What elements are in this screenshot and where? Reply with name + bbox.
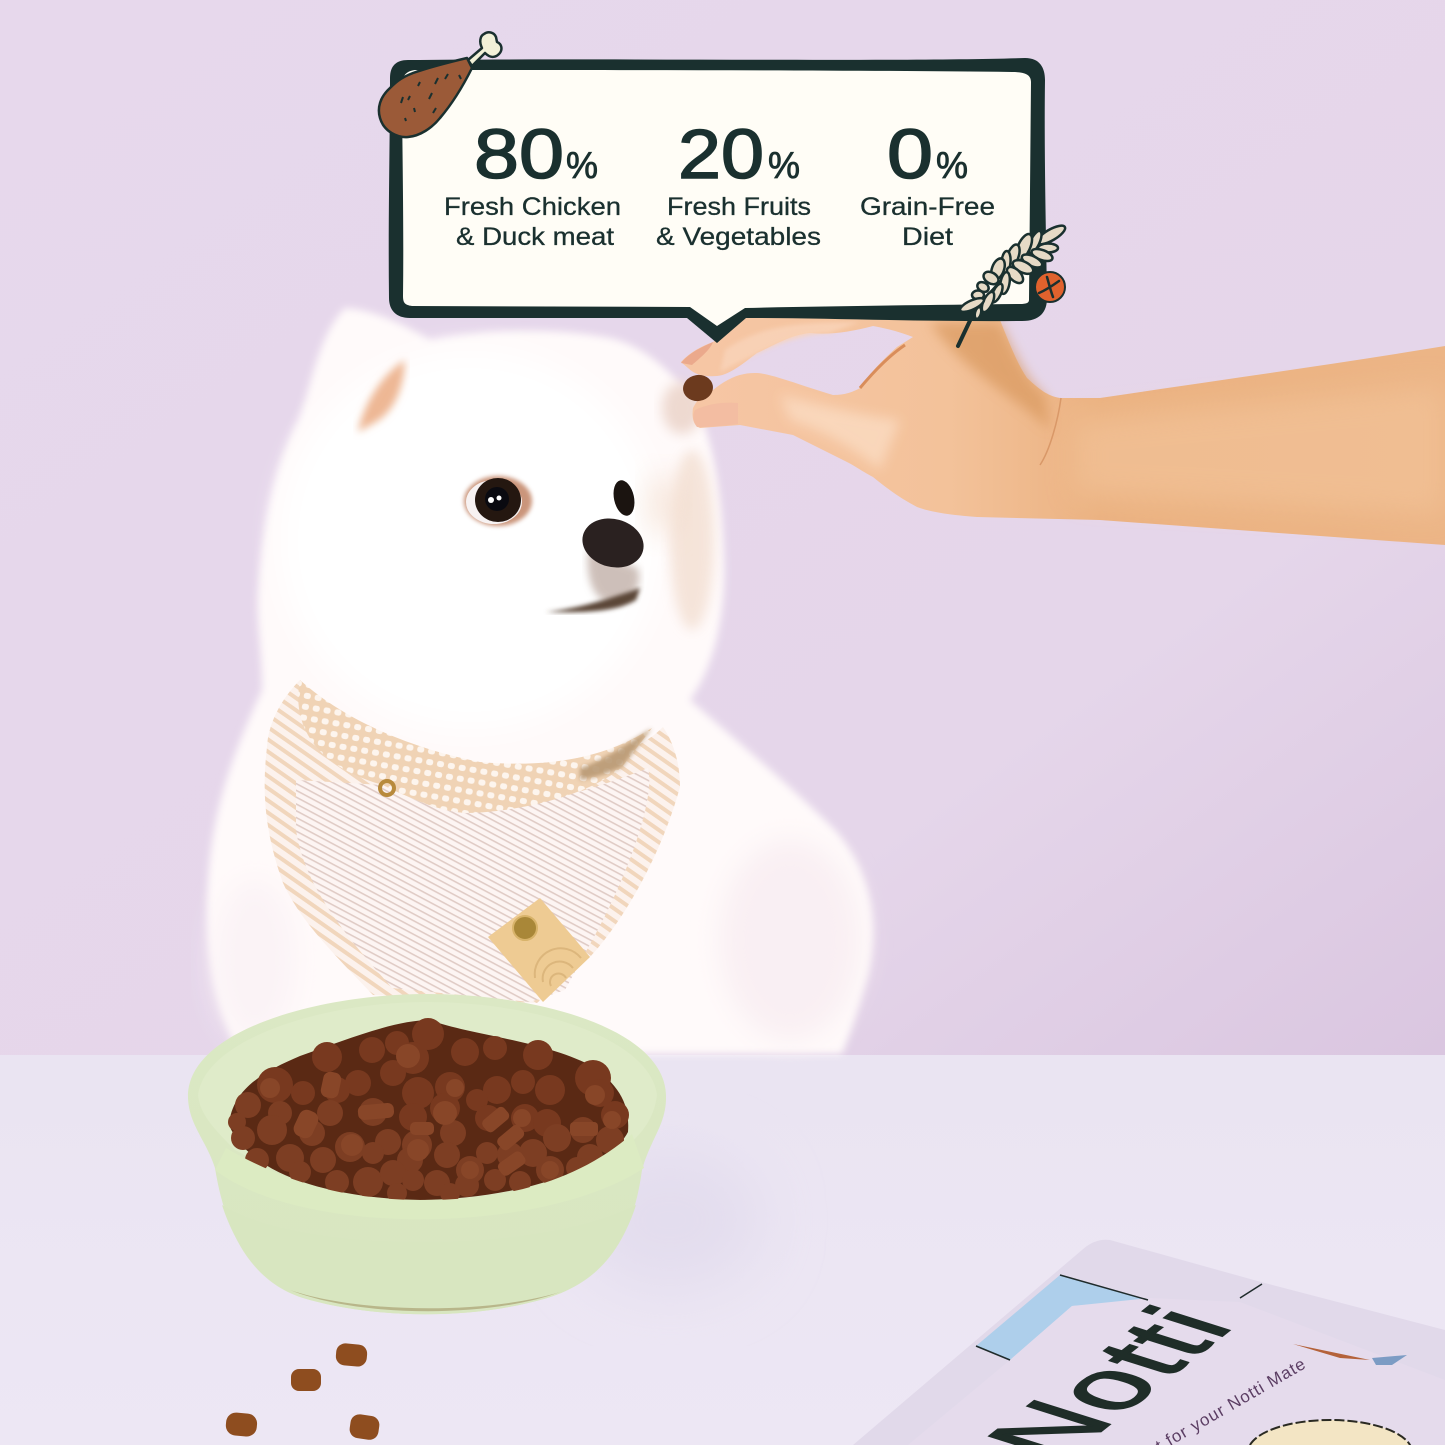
bowl foot shadow bbox=[290, 1290, 560, 1311]
wrist crease bbox=[1040, 398, 1061, 465]
arm and hand shape bbox=[681, 316, 1445, 545]
neck band checks bbox=[298, 680, 652, 813]
dog silhouette bbox=[207, 308, 873, 1054]
background wall bbox=[0, 0, 1445, 1056]
collar shadow bbox=[580, 728, 652, 780]
blue accent bbox=[1372, 1355, 1407, 1365]
back of hand shade bbox=[930, 322, 1050, 430]
bubble fill bbox=[402, 70, 1031, 326]
thumb nail bbox=[693, 403, 738, 427]
bowl bbox=[188, 994, 666, 1314]
stat: 20% bbox=[656, 115, 821, 251]
stat: 0%: Diet bbox=[902, 223, 953, 251]
bandana bbox=[265, 680, 680, 1003]
arm highlight bbox=[1075, 385, 1445, 515]
stat: 0%: 0 bbox=[887, 115, 933, 193]
grommet bbox=[380, 781, 394, 795]
stat: 20%: 20 bbox=[678, 115, 764, 193]
thumb highlight bbox=[780, 395, 900, 470]
stat: 80%: & Duck meat bbox=[456, 223, 614, 251]
stat: 0%: Grain-Free bbox=[860, 193, 995, 221]
bowl body bbox=[188, 994, 666, 1314]
cheek fur shading bbox=[670, 450, 714, 630]
bowl lower band shading bbox=[222, 1205, 636, 1314]
finger highlight bbox=[720, 322, 860, 372]
index nail bbox=[681, 342, 713, 365]
pouch seal lines bbox=[976, 1275, 1262, 1360]
lower left body shading bbox=[215, 880, 295, 1040]
white face bbox=[280, 350, 660, 730]
red cross badge bbox=[1035, 272, 1065, 302]
wheat grains bbox=[958, 222, 1068, 320]
bandana fringe base bbox=[265, 680, 680, 1003]
scattered kibble bbox=[225, 1343, 381, 1441]
speech bubble bbox=[389, 58, 1047, 343]
stat: 80%: 80 bbox=[474, 115, 564, 193]
pouch body bbox=[853, 1240, 1445, 1445]
stat: 80%: Fresh Chicken bbox=[444, 193, 621, 221]
blue label strip bbox=[976, 1275, 1148, 1360]
left ear inner bbox=[358, 360, 405, 432]
bowl shadow bbox=[580, 1150, 760, 1290]
hand bbox=[681, 316, 1445, 545]
right ear bbox=[662, 382, 702, 434]
held kibble bbox=[681, 373, 715, 403]
pouch front panel bbox=[908, 1298, 1445, 1445]
icon: chicken drumstick bbox=[379, 32, 501, 137]
table surface bbox=[0, 1055, 1445, 1445]
stat: 0% bbox=[860, 115, 995, 251]
right eye bbox=[610, 478, 638, 518]
orange accent bbox=[1293, 1344, 1370, 1360]
mouth line bbox=[546, 588, 640, 612]
nose bbox=[577, 512, 649, 574]
icon: wheat crossed out bbox=[958, 222, 1068, 346]
stat: 80%: % bbox=[566, 145, 598, 186]
wheat stem bbox=[958, 238, 1050, 346]
kibble pile bbox=[228, 1018, 629, 1203]
stat: 20%: & Vegetables bbox=[656, 223, 821, 251]
stat: 20%: Fresh Fruits bbox=[667, 193, 811, 221]
stat: 20%: % bbox=[768, 145, 800, 186]
thumb web crease bbox=[860, 345, 905, 388]
dog bbox=[207, 308, 873, 1054]
stat: 80% bbox=[444, 115, 621, 251]
bandana woven panel bbox=[296, 768, 649, 1002]
cookie illustration bbox=[1248, 1420, 1412, 1445]
body pink shading bbox=[720, 840, 860, 1040]
leather tag bbox=[488, 898, 590, 1002]
bubble outline bbox=[389, 58, 1047, 343]
stat: 0%: % bbox=[936, 145, 968, 186]
cheek tan near eye bbox=[646, 473, 682, 537]
muzzle shade bbox=[588, 550, 639, 604]
bowl interior bbox=[198, 1002, 657, 1200]
bowl front rim covering kibble bbox=[215, 1134, 644, 1219]
cross mark bbox=[1039, 277, 1059, 297]
product pouch bbox=[853, 1240, 1445, 1445]
left eye bbox=[464, 476, 532, 526]
